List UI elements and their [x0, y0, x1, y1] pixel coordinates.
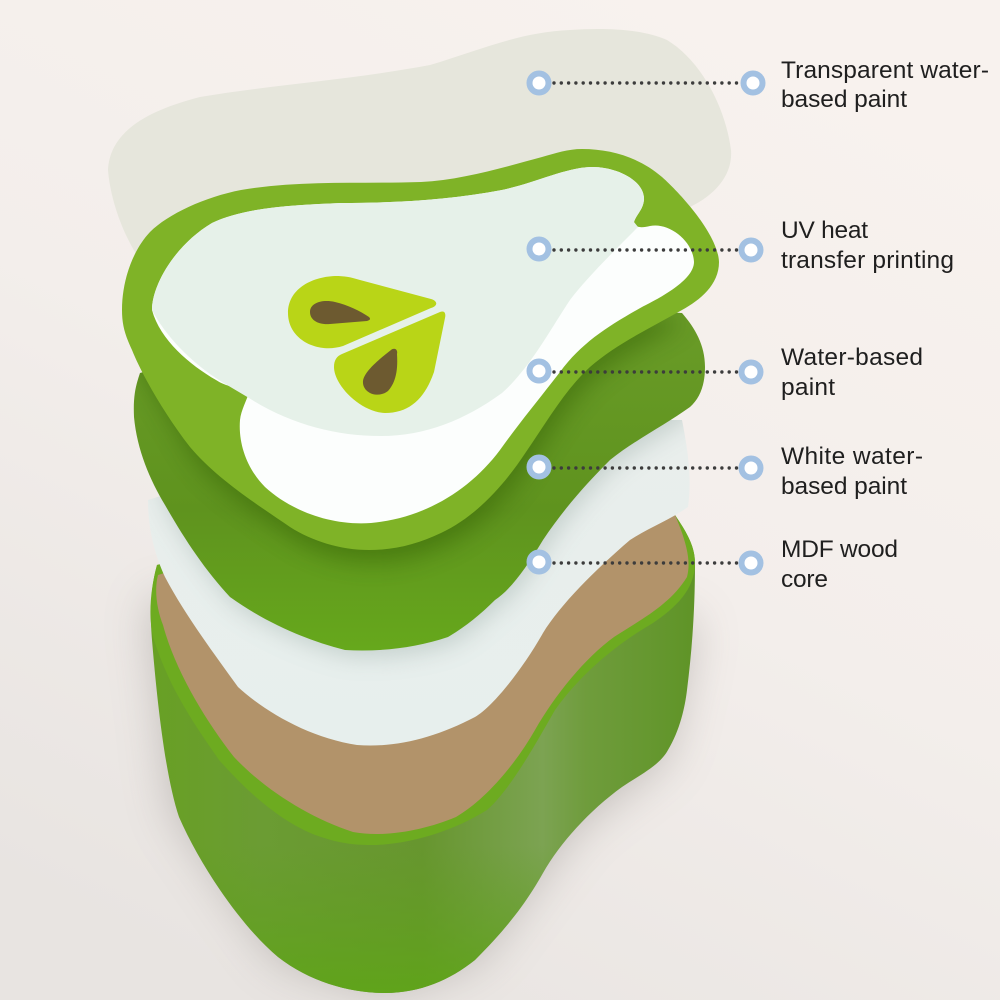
callout 1: transparent water-based paint [530, 57, 989, 113]
seed left [310, 301, 370, 324]
stool body [151, 500, 695, 993]
callout 5: MDF wood core [530, 536, 898, 593]
seed right [363, 349, 397, 395]
callout 2: UV heat transfer printing: transfer printing [781, 247, 954, 274]
layer: transparent water-based paint [108, 29, 731, 300]
wood core [156, 500, 689, 834]
stool rim [150, 500, 695, 845]
stool floor shadow [150, 600, 695, 992]
layer: MDF wood core stool [150, 500, 695, 993]
callout 4: white water-based paint: White water- [781, 443, 923, 470]
callout 3: water-based paint [530, 344, 923, 401]
pear mint flesh [152, 167, 644, 436]
callout 1: transparent water-based paint: Transparent water- [781, 57, 989, 84]
callout 5: MDF wood core: core [781, 566, 828, 593]
callout 3: water-based paint: paint [781, 374, 835, 401]
seed pocket right [334, 311, 445, 413]
layer: white water-based paint [148, 420, 690, 746]
callout 3: water-based paint: Water-based [781, 344, 923, 371]
callout 4: white water-based paint: based paint [781, 473, 907, 500]
pear white flesh [152, 167, 694, 523]
layer: water-based paint [134, 312, 705, 650]
callout 2: UV heat transfer printing [530, 217, 954, 274]
layer: UV heat transfer printing pear [122, 149, 719, 550]
callout 2: UV heat transfer printing: UV heat [781, 217, 868, 244]
callout 1: transparent water-based paint: based paint [781, 86, 907, 113]
pear green border [122, 149, 719, 550]
seed pocket left [288, 276, 436, 348]
callout 4: white water-based paint [530, 443, 923, 500]
callout 5: MDF wood core: MDF wood [781, 536, 898, 563]
